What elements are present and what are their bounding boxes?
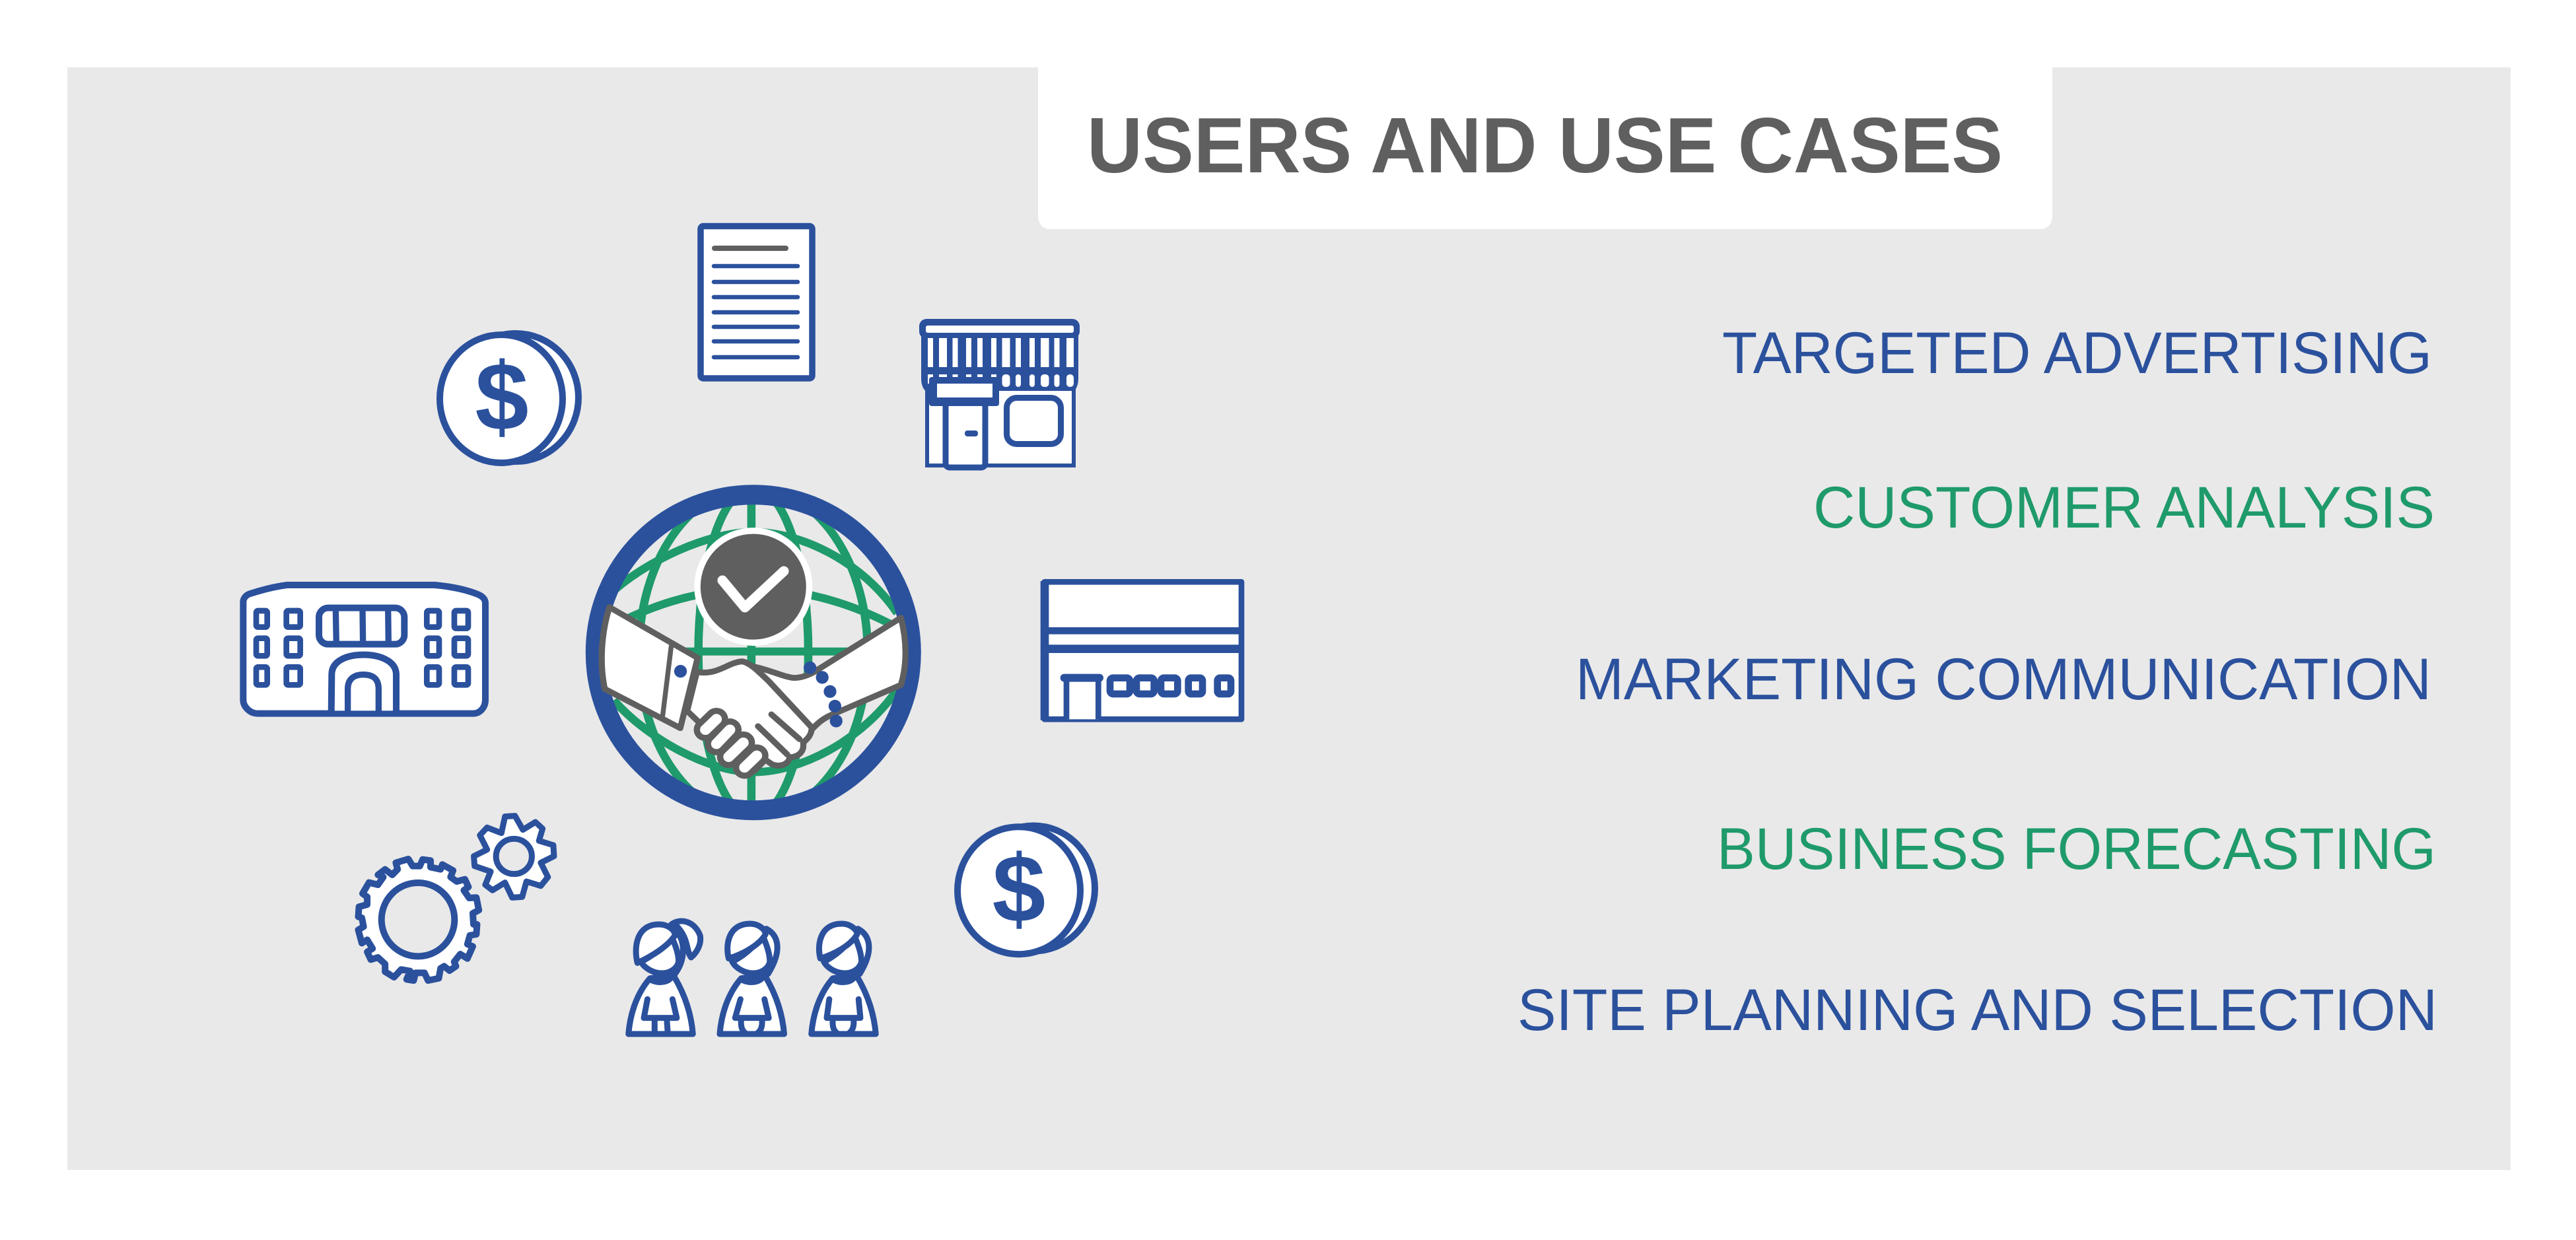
icon: coin lower right — [957, 825, 1095, 954]
icon: document — [701, 226, 812, 378]
icon: gears — [359, 816, 554, 981]
icon: storefront — [1042, 581, 1243, 720]
icon: coin upper left: $ — [475, 343, 529, 450]
large gear — [359, 859, 479, 981]
use case: site planning and selection: SITE PLANNING AND SELECTION — [1517, 977, 2437, 1043]
person — [720, 924, 784, 1034]
person — [812, 924, 876, 1034]
use case: targeted advertising: TARGETED ADVERTISING — [1722, 320, 2432, 386]
check badge — [694, 528, 812, 646]
icon: coin lower right: $ — [992, 835, 1045, 942]
person with ponytail — [629, 921, 701, 1034]
title tab — [1038, 66, 2052, 229]
small gear — [474, 816, 554, 897]
use case: marketing communication: MARKETING COMMUNICATION — [1576, 646, 2431, 712]
icon: coin upper left — [440, 333, 578, 463]
icon: three people — [629, 921, 876, 1034]
handshake — [602, 607, 905, 771]
icon: central globe and handshake — [596, 486, 911, 817]
use case: business forecasting: BUSINESS FORECASTING — [1717, 815, 2436, 881]
title: USERS AND USE CASES — [1087, 102, 2003, 189]
globe grid — [613, 504, 897, 800]
outer ring — [596, 495, 911, 810]
icon: shop with awning — [919, 319, 1080, 467]
icon: large building — [243, 585, 485, 714]
use case: customer analysis: CUSTOMER ANALYSIS — [1813, 474, 2435, 540]
use case list — [1517, 320, 2437, 1043]
